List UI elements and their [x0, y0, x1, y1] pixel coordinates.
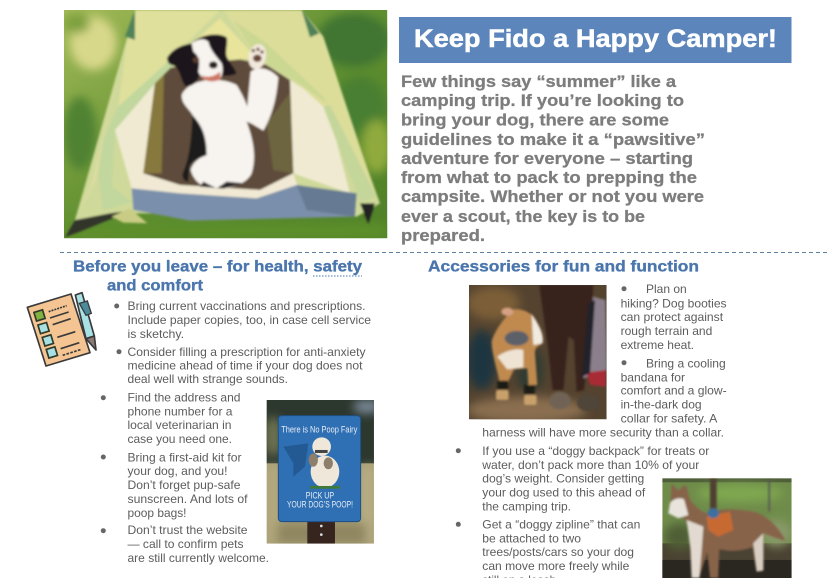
bullet list: before you leave: Find the address and: [128, 391, 240, 405]
photo: dog waving in a tent: [63, 10, 392, 238]
intro paragraph: campsite. Whether or not you were: [401, 187, 704, 206]
bullet list: before you leave: deal well with strange sounds.: [128, 372, 288, 386]
bullet list: accessories: Plan on: [646, 282, 687, 296]
dog: [182, 68, 278, 188]
heading: before you leave: [73, 258, 362, 294]
intro paragraph: bring your dog, there are some: [401, 110, 669, 130]
bullet list: before you leave: Bring current vaccinations and prescriptions.: [128, 299, 366, 313]
bullet list: before you leave: medicine ahead of time if your dog does not: [128, 358, 363, 372]
bullet list: before you leave: poop bags!: [128, 506, 186, 520]
bullet list: before you leave: your dog, and you!: [128, 464, 228, 478]
bullet list: accessories: be attached to two: [482, 532, 581, 546]
bullet list: before you leave: Consider filling a prescription for anti-anxiety: [128, 345, 366, 359]
intro paragraph: guidelines to make it a “pawsitive”: [401, 130, 705, 149]
icon: checklist and pen: [27, 293, 96, 366]
bullet list: accessories: If you use a “doggy backpack” for treats or: [482, 444, 709, 458]
bullet list: accessories: trees/posts/cars so your dog: [482, 545, 634, 559]
bullet list: accessories: Bring a cooling: [646, 356, 726, 370]
intro paragraph: from what to pack to prepping the: [401, 168, 697, 187]
intro paragraph: [401, 72, 705, 245]
bullet list: before you leave: phone number for a: [128, 405, 233, 419]
bullet list: accessories: can protect against: [621, 310, 724, 324]
bullet list: accessories: collar for safety. A: [621, 412, 717, 426]
bullet list: before you leave: Bring a first-aid kit for: [128, 451, 242, 465]
bullet list: accessories: water, don’t pack more than 10% of your: [481, 458, 699, 472]
bullet list: accessories: comfort and a glow-: [621, 383, 727, 397]
heading: accessories: Accessories for fun and function: [428, 258, 699, 276]
bullet list: before you leave: sunscreen. And lots of: [128, 492, 248, 506]
bullet list: accessories: bandana for: [621, 370, 685, 384]
bullet list: before you leave: [101, 299, 371, 565]
bullet list: before you leave: case you need one.: [128, 432, 232, 446]
bullet list: before you leave: — call to confirm pets: [128, 537, 244, 551]
bullet list: accessories: harness will have more security than a collar.: [482, 426, 724, 440]
photo: pick up your dog's poop sign: [263, 400, 380, 544]
intro paragraph: prepared.: [401, 226, 485, 245]
bullet list: before you leave: Don’t trust the website: [128, 523, 248, 537]
bullet list: accessories: can move more freely while: [482, 559, 630, 573]
bullet list: accessories: your dog used to this ahead of: [482, 485, 646, 499]
heading: before you leave: Before you leave – for health, safety: [73, 258, 362, 276]
bullet list: before you leave: are still currently welcome.: [128, 551, 269, 565]
photo: dog wearing booties beside hiker: [467, 285, 607, 423]
bullet list: before you leave: Include paper copies, too, in case cell service: [128, 313, 371, 327]
title banner: [399, 17, 792, 63]
photo: pick up your dog's poop sign: YOUR DOG’S POOP!: [287, 499, 353, 509]
bullet list: accessories: in-the-dark dog: [621, 398, 702, 412]
bullet list: accessories: Get a “doggy zipline” that can: [482, 518, 640, 532]
photo: pick up your dog's poop sign: There is No Poop Fairy: [281, 424, 358, 434]
intro paragraph: Few things say “summer” like a: [401, 72, 677, 91]
intro paragraph: adventure for everyone – starting: [401, 149, 693, 168]
title banner: Keep Fido a Happy Camper!: [414, 25, 777, 53]
bullet list: accessories: dog’s weight. Consider getting: [482, 471, 644, 485]
photo: pick up your dog's poop sign: PICK UP: [306, 491, 334, 501]
bullet list: before you leave: local veterinarian in: [128, 418, 232, 432]
intro paragraph: camping trip. If you’re looking to: [401, 91, 684, 110]
bullet list: accessories: the camping trip.: [482, 499, 571, 513]
bullet list: accessories: hiking? Dog booties: [621, 296, 727, 310]
intro paragraph: ever a scout, the key is to be: [401, 207, 645, 226]
bullet list: accessories: [456, 282, 727, 578]
heading: before you leave: and comfort: [107, 278, 204, 294]
photo: husky with backpack: [662, 478, 792, 578]
bullet list: accessories: rough terrain and: [621, 324, 712, 338]
bullet list: before you leave: Don’t forget pup-safe: [128, 478, 241, 492]
bullet list: before you leave: is sketchy.: [128, 327, 184, 341]
bullet list: accessories: extreme heat.: [621, 338, 694, 352]
